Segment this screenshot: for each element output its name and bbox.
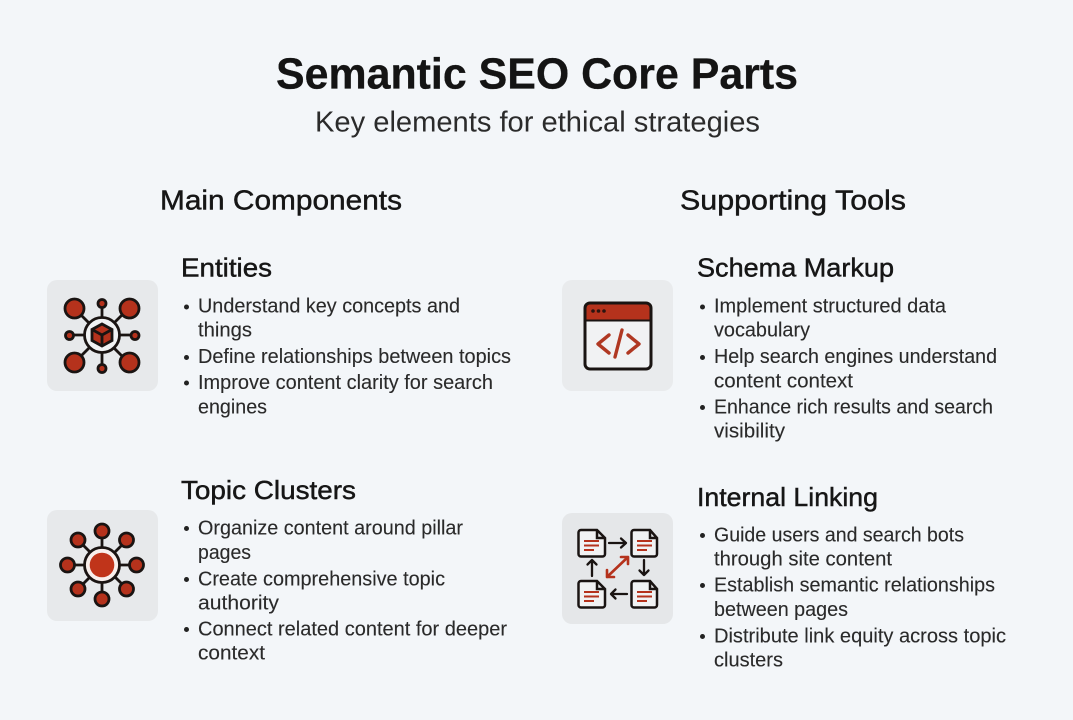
bullet list: schema markup: vocabulary [714,319,811,342]
heading: schema markup: Schema Markup [697,253,894,283]
bullet list: entities: Improve content clarity for search [198,371,493,394]
bullet list: entities: Define relationships between topics [198,345,511,368]
bullet list: schema markup [700,295,997,442]
bullet list: topic clusters: authority [198,592,280,614]
bullet list: topic clusters: Connect related content for deeper [198,618,507,640]
bullet list: entities: Understand key concepts and [198,295,460,318]
bullet list: internal linking: Guide users and search bots [714,524,964,546]
title: Semantic SEO Core Parts [276,49,798,98]
bullet list: entities: things [198,319,252,342]
icon: entity network [47,280,158,391]
icon: topic cluster hub [47,510,158,621]
heading: main components: Main Components [160,184,402,216]
panel: internal linking [562,482,1006,672]
panel: entities [47,253,511,418]
bullet list: schema markup: Implement structured data [714,295,947,318]
bullet list: topic clusters: pages [198,541,251,564]
bullet list: topic clusters: Organize content around pillar [198,516,463,540]
icon: linked documents [562,513,673,624]
bullet list: internal linking: Distribute link equity across topic [714,624,1006,648]
heading: internal linking: Internal Linking [697,482,878,512]
heading: entities: Entities [181,253,272,283]
bullet list: topic clusters [184,516,507,664]
bullet list: schema markup: content context [714,370,853,392]
bullet list: internal linking: Establish semantic relationships [714,574,995,596]
bullet list: schema markup: visibility [714,420,786,442]
bullet list: topic clusters: Create comprehensive topic [198,568,445,590]
icon: code window [562,280,673,391]
panel: schema markup [562,253,997,442]
bullet list: entities [184,295,511,418]
heading: supporting tools: Supporting Tools [680,184,906,216]
bullet list: internal linking [700,524,1006,672]
bullet list: internal linking: clusters [714,648,783,672]
subtitle: Key elements for ethical strategies [315,106,760,138]
panel: topic clusters [47,475,507,664]
heading: topic clusters: Topic Clusters [181,475,356,505]
bullet list: schema markup: Help search engines understand [714,345,997,368]
bullet list: internal linking: between pages [714,598,848,621]
bullet list: schema markup: Enhance rich results and search [714,396,993,418]
bullet list: topic clusters: context [198,642,265,664]
bullet list: entities: engines [198,395,267,418]
bullet list: internal linking: through site content [714,548,892,570]
